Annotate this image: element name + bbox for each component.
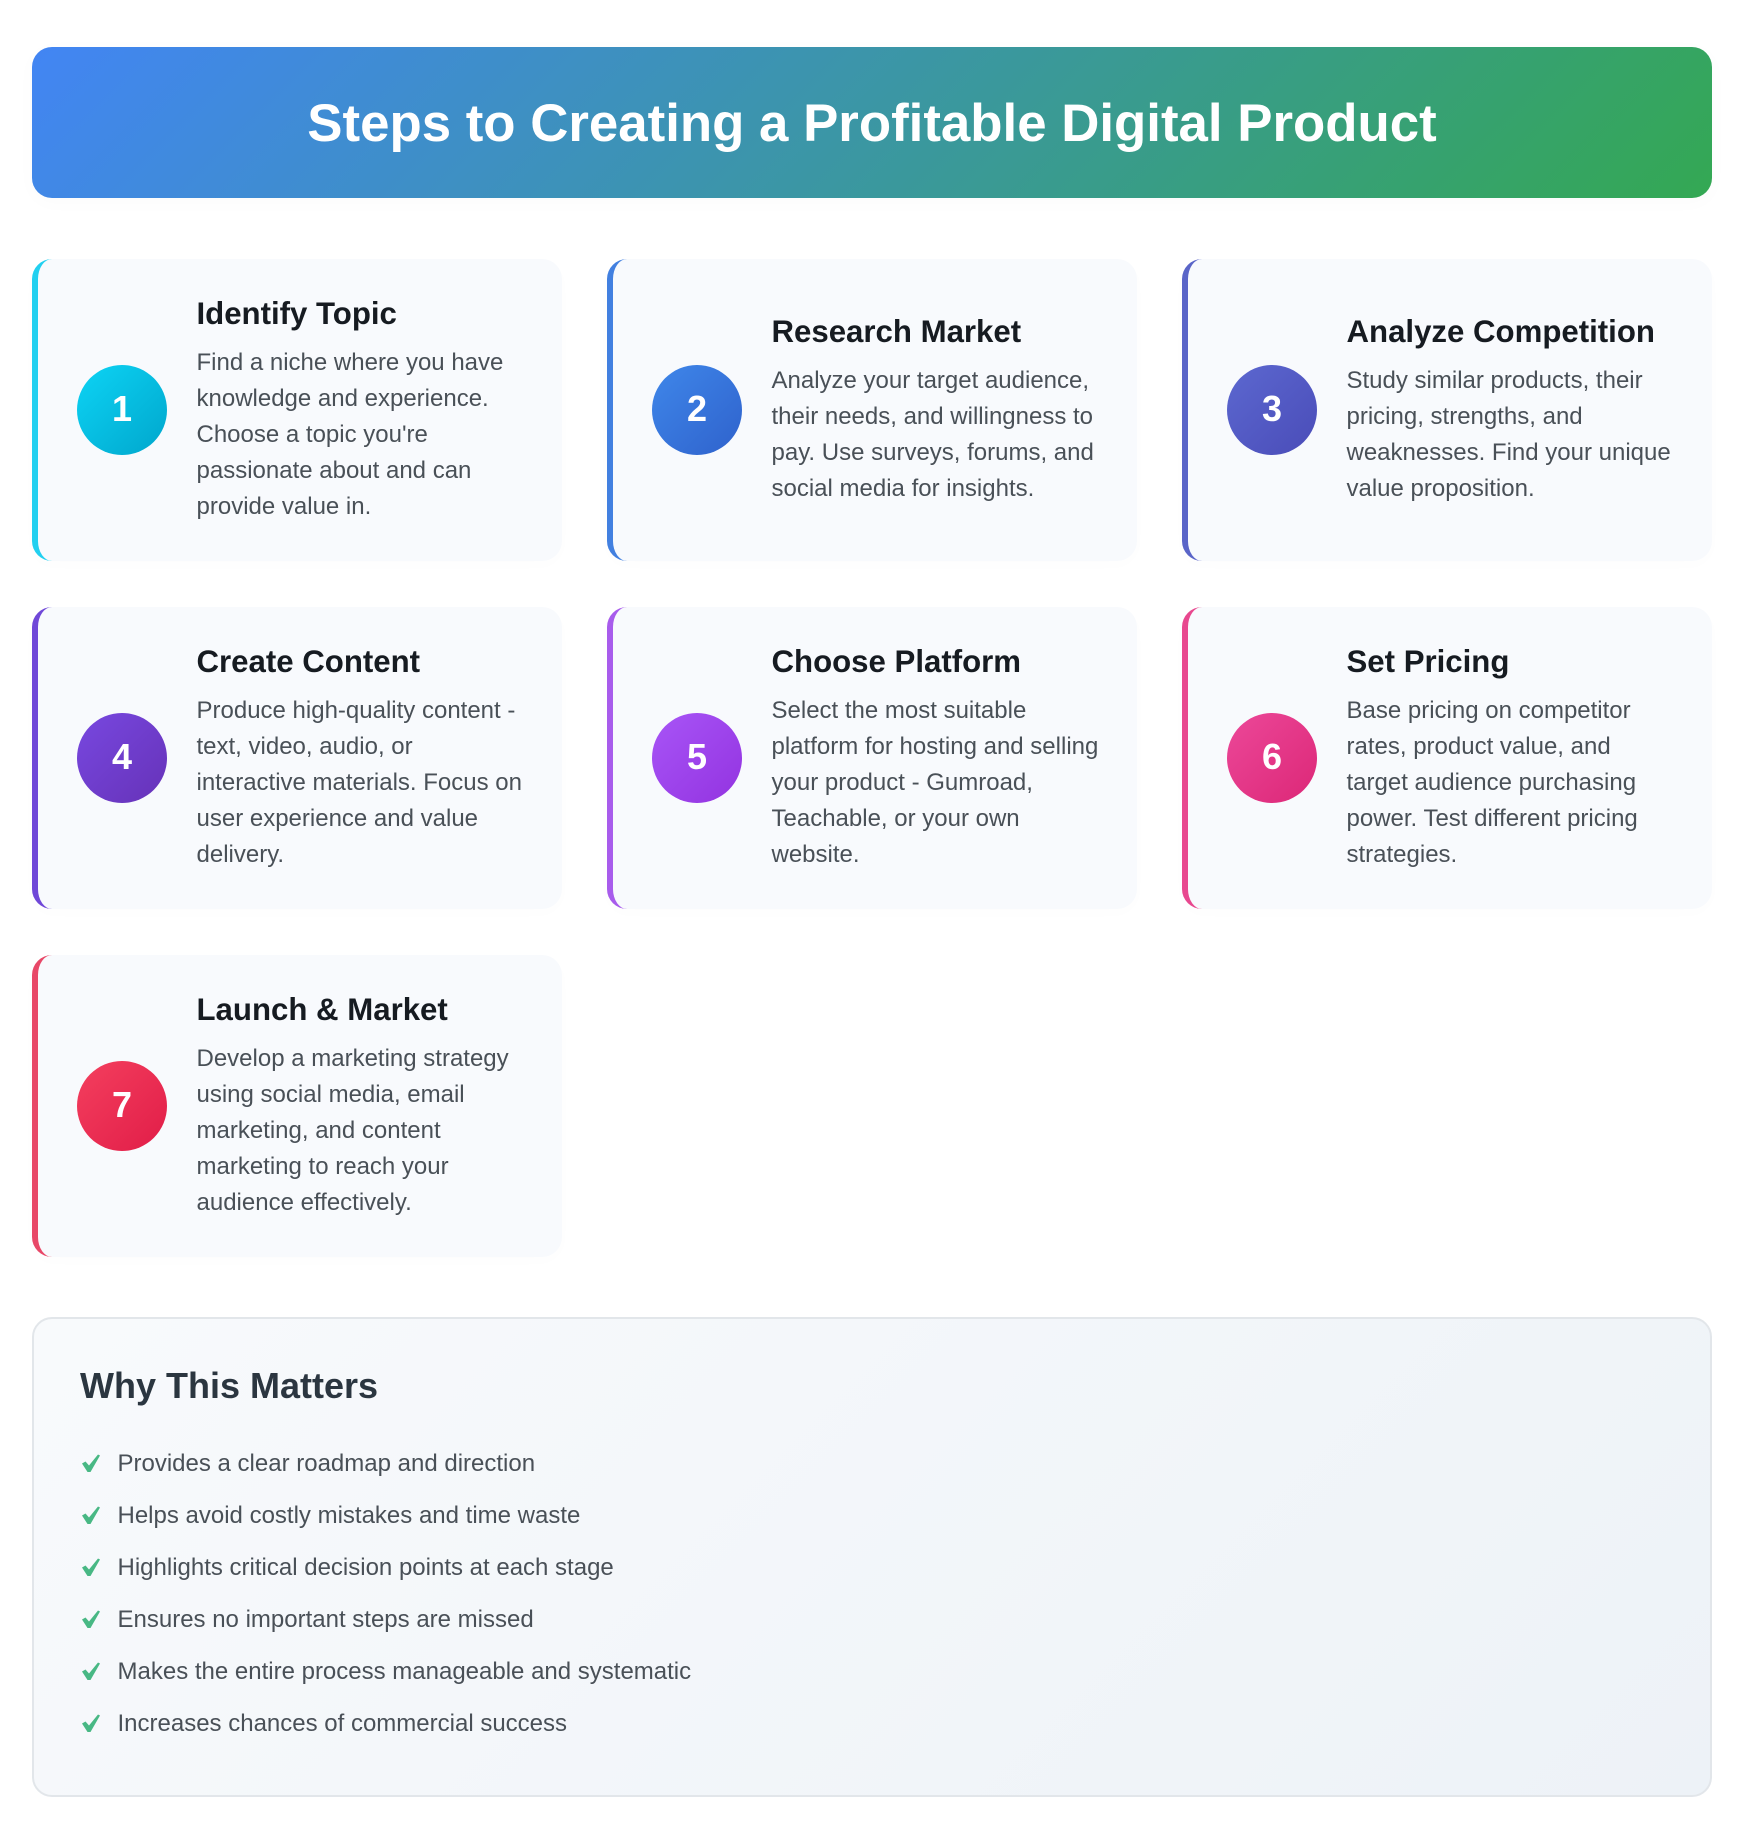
step 2 text: Analyze your target audience, xyxy=(772,367,1089,394)
step 1 text: knowledge and experience. xyxy=(196,385,489,412)
step number 2: 2 xyxy=(687,388,707,429)
checklist: Makes the entire process manageable and systematic xyxy=(118,1658,691,1685)
step number 6 xyxy=(1227,713,1317,803)
step 7 text: marketing, and content xyxy=(196,1117,441,1144)
step 1 text: passionate about and can xyxy=(196,457,471,484)
step card 6: Set Pricing xyxy=(1182,607,1712,909)
step number 4 xyxy=(77,713,167,803)
step 3 text: weaknesses. Find your unique xyxy=(1346,439,1671,466)
step 6 text: Set Pricing xyxy=(1346,644,1509,679)
step 5 text: Select the most suitable xyxy=(772,697,1026,724)
step 4 text: interactive materials. Focus on xyxy=(196,769,522,796)
step 3 text xyxy=(1346,314,1671,502)
step 6 text xyxy=(1346,644,1638,868)
step number 5 xyxy=(652,713,742,803)
step 7 text: Launch & Market xyxy=(196,992,448,1027)
step number 1 xyxy=(77,365,167,455)
step 2 text: pay. Use surveys, forums, and xyxy=(772,439,1094,466)
step number 4: 4 xyxy=(112,736,132,777)
step 4 text: delivery. xyxy=(196,841,284,868)
step number 2 xyxy=(652,365,742,455)
step number 3 xyxy=(1227,365,1317,455)
step 5 text: your product - Gumroad, xyxy=(772,769,1033,796)
step 3 text: value proposition. xyxy=(1346,475,1535,502)
step card 5: Choose Platform xyxy=(607,607,1137,909)
step 6 text: Base pricing on competitor xyxy=(1346,697,1631,724)
checklist: Helps avoid costly mistakes and time waste xyxy=(118,1502,580,1529)
step number 3: 3 xyxy=(1262,388,1282,429)
step 4 text: Produce high-quality content - xyxy=(196,697,515,724)
step 7 text: marketing to reach your xyxy=(196,1153,449,1180)
panel heading: Why This Matters xyxy=(80,1365,378,1406)
step 5 text: Teachable, or your own xyxy=(772,805,1020,832)
step 6 text: strategies. xyxy=(1346,841,1457,868)
step number 7 xyxy=(77,1061,167,1151)
step 5 text: Choose Platform xyxy=(772,644,1021,679)
step 3 text: Study similar products, their xyxy=(1346,367,1643,394)
step 5 text: website. xyxy=(772,841,860,868)
step card 1: Identify Topic xyxy=(32,259,562,561)
panel: why this matters xyxy=(32,1317,1712,1797)
step 1 text: provide value in. xyxy=(196,493,371,520)
step 4 text: Create Content xyxy=(196,644,420,679)
step number 1: 1 xyxy=(112,388,132,429)
step 6 text: power. Test different pricing xyxy=(1346,805,1638,832)
step 1 text: Choose a topic you're xyxy=(196,421,428,448)
step 3 text: pricing, strengths, and xyxy=(1346,403,1583,430)
step 1 text xyxy=(196,296,503,520)
step 2 text: social media for insights. xyxy=(772,475,1034,502)
checklist xyxy=(82,1450,691,1737)
step card 3: Analyze Competition xyxy=(1182,259,1712,561)
step 1 text: Identify Topic xyxy=(196,296,397,331)
step 4 text: text, video, audio, or xyxy=(196,733,413,760)
checklist: Increases chances of commercial success xyxy=(118,1710,567,1737)
step 3 text: Analyze Competition xyxy=(1346,314,1655,349)
step card 2: Research Market xyxy=(607,259,1137,561)
step 7 text: audience effectively. xyxy=(196,1189,412,1216)
step 7 text: Develop a marketing strategy xyxy=(196,1045,509,1072)
step 1 text: Find a niche where you have xyxy=(196,349,503,376)
step 7 text: using social media, email xyxy=(196,1081,465,1108)
step 2 text: their needs, and willingness to xyxy=(772,403,1093,430)
step 4 text xyxy=(196,644,522,868)
step card 4: Create Content xyxy=(32,607,562,909)
step 5 text: platform for hosting and selling xyxy=(772,733,1098,760)
step 2 text: Research Market xyxy=(772,314,1021,349)
step number 5: 5 xyxy=(687,736,707,777)
title: Steps to Creating a Profitable Digital Product xyxy=(307,94,1437,153)
step number 7: 7 xyxy=(112,1084,132,1125)
step 4 text: user experience and value xyxy=(196,805,478,832)
step 6 text: target audience purchasing xyxy=(1346,769,1636,796)
checklist: Provides a clear roadmap and direction xyxy=(118,1450,535,1477)
step 7 text xyxy=(196,992,509,1216)
checklist: Ensures no important steps are missed xyxy=(118,1606,534,1633)
step number 6: 6 xyxy=(1262,736,1282,777)
header banner xyxy=(32,47,1712,198)
step card 7: Launch & Market xyxy=(32,955,562,1257)
step 5 text xyxy=(772,644,1098,868)
step 2 text xyxy=(772,314,1094,502)
checklist: Highlights critical decision points at each stage xyxy=(118,1554,614,1581)
step 6 text: rates, product value, and xyxy=(1346,733,1611,760)
